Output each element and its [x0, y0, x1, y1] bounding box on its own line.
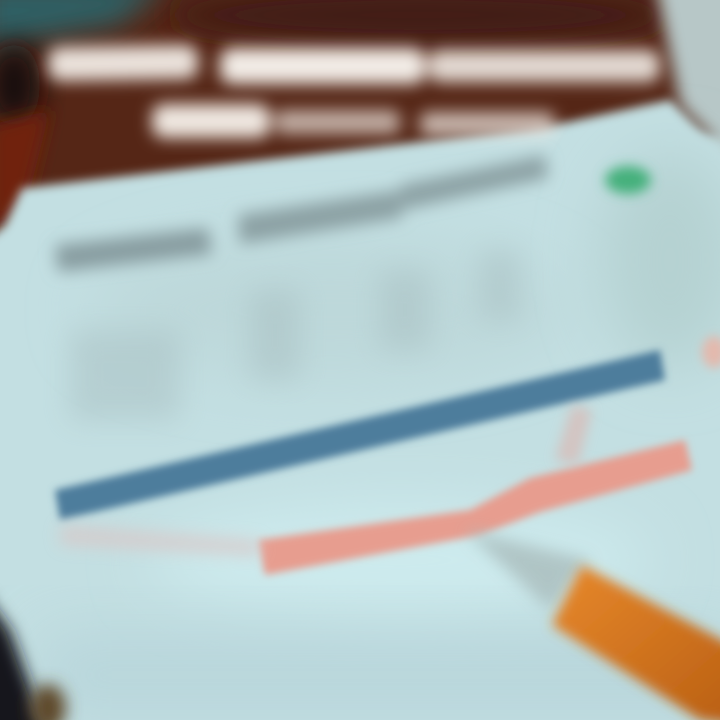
body text: faint grey blurred columns — [70, 250, 520, 420]
heading on paper: grey blurred text — [55, 155, 548, 272]
dark bottom-left corner — [0, 590, 66, 720]
chart line: salmon band — [60, 336, 720, 575]
icon: orange pencil — [552, 565, 720, 720]
title: blurred white heading, first line — [48, 45, 660, 84]
title: blurred white heading, second line — [152, 104, 555, 138]
chart line: blue band — [55, 350, 665, 520]
pencil tip — [465, 530, 590, 610]
icon: green mark — [605, 166, 651, 194]
